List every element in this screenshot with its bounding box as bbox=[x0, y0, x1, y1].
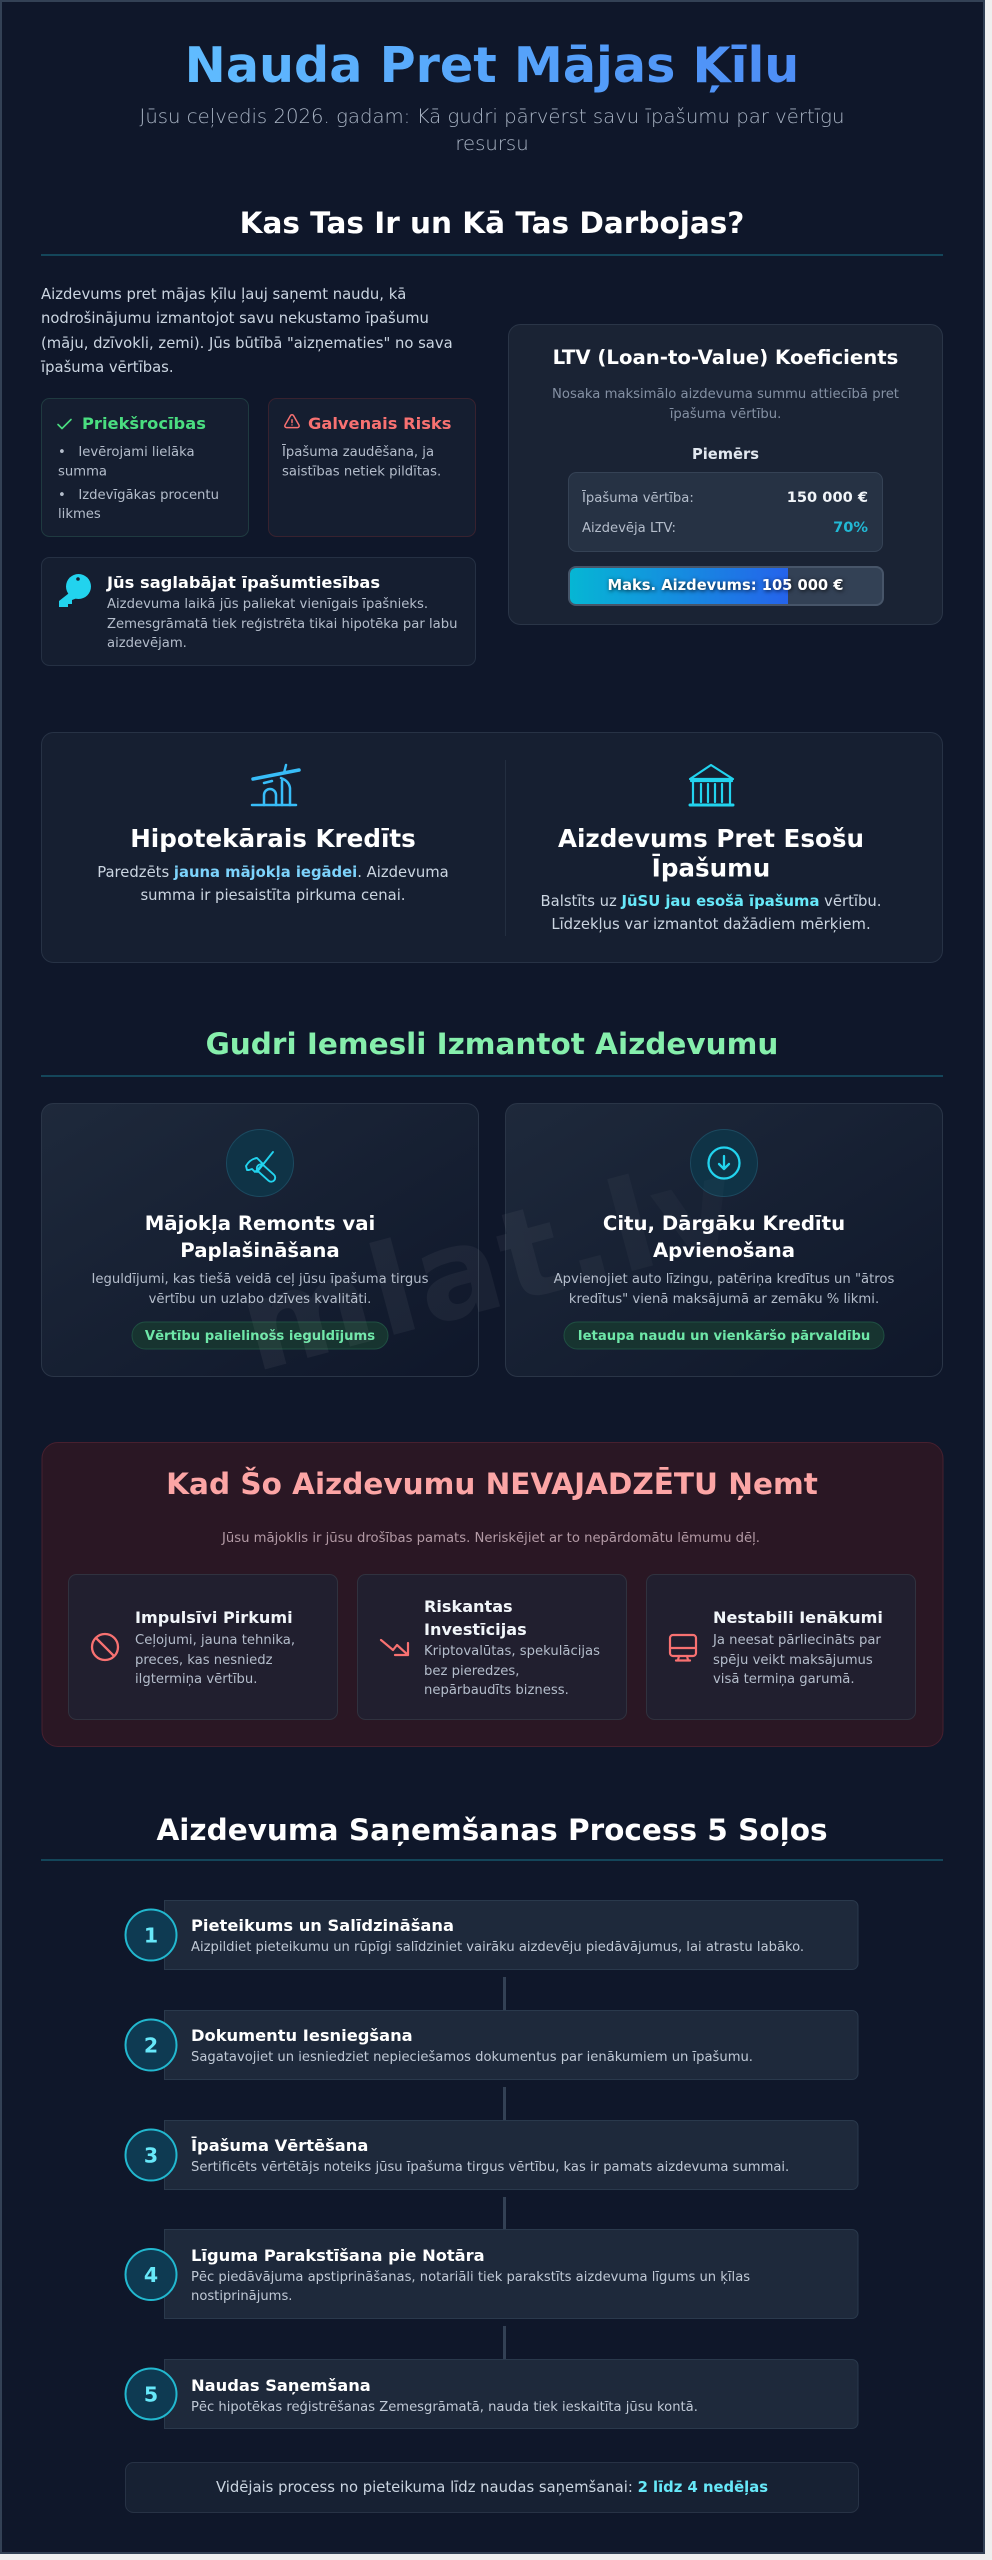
card: unstable income: visā termiņa garumā. bbox=[713, 1672, 855, 1687]
panel: comparison: Paredzēts jauna mājokļa iegādei. Aizdevuma bbox=[97, 864, 449, 881]
icon: check bbox=[58, 420, 71, 428]
panel: ownership bbox=[42, 558, 476, 666]
card: risky investments: Riskantas bbox=[424, 1597, 513, 1616]
panel: renovation: Ieguldījumi, kas tiešā veidā ceļ jūsu īpašuma tirgus bbox=[92, 1271, 429, 1287]
panel: comparison: Hipotekārais Kredīts bbox=[130, 824, 416, 853]
card: risky investments bbox=[358, 1574, 626, 1720]
panel: refinancing: kredītus" vienā maksājumā ar zemāku % likmi. bbox=[569, 1292, 879, 1307]
panel: renovation: vērtību un uzlabo dzīves kvalitāti. bbox=[149, 1292, 371, 1307]
max loan bar bbox=[569, 567, 883, 605]
card: impulse purchases: ilgtermiņa vērtību. bbox=[135, 1672, 257, 1687]
panel: main risk: Galvenais Risks bbox=[308, 414, 451, 433]
step 2: 2 bbox=[144, 2034, 158, 2058]
step 1 bbox=[126, 1900, 858, 1970]
intro paragraph: Aizdevums pret mājas ķīlu ļauj saņemt naudu, kā bbox=[41, 286, 406, 303]
panel: comparison: Aizdevums Pret Esošu bbox=[558, 824, 864, 853]
panel: advantages bbox=[42, 398, 248, 536]
step 5: 5 bbox=[144, 2382, 158, 2406]
step 3: Īpašuma Vērtēšana bbox=[191, 2135, 368, 2155]
intro paragraph: (māju, dzīvokli, zemi). Jūs būtībā "aizņematies" no sava bbox=[41, 335, 453, 352]
panel: LTV: LTV (Loan-to-Value) Koeficients bbox=[553, 346, 898, 369]
example values: 150 000 € bbox=[787, 489, 868, 506]
step 1: 1 bbox=[144, 1924, 158, 1948]
panel: main risk: saistības netiek pildītas. bbox=[282, 464, 441, 480]
heading: what it is: Kas Tas Ir un Kā Tas Darbojas? bbox=[240, 206, 744, 240]
panel: comparison: Balstīts uz JūSU jau esošā īpašuma vērtību. bbox=[540, 893, 882, 910]
card: unstable income: spēju veikt maksājumus bbox=[713, 1653, 873, 1668]
card: risky investments: Investīcijas bbox=[424, 1620, 527, 1639]
panel: refinancing: Apvienojiet auto līzingu, patēriņa kredītus un "ātros bbox=[554, 1272, 894, 1287]
step 1: Aizpildiet pieteikumu un rūpīgi salīdziniet vairāku aizdevēju piedāvājumus, lai atrastu labāko. bbox=[191, 1940, 804, 1955]
panel: when not to take bbox=[42, 1442, 943, 1746]
panel: LTV: īpašuma vērtību. bbox=[669, 406, 781, 422]
panel: advantages: likmes bbox=[58, 507, 101, 522]
title: Nauda Pret Mājas Ķīlu bbox=[185, 36, 799, 94]
panel: when not to take: Jūsu mājoklis ir jūsu drošības pamats. Neriskējiet ar to nepārdomātu lēmumu dēļ. bbox=[221, 1530, 760, 1546]
panel: ownership: aizdevējam. bbox=[107, 636, 187, 651]
card: impulse purchases: Ceļojumi, jauna tehnika, bbox=[135, 1633, 295, 1648]
card: risky investments: nepārbaudīts bizness. bbox=[424, 1683, 569, 1698]
icon: bank bbox=[690, 765, 733, 805]
step 5: Pēc hipotēkas reģistrēšanas Zemesgrāmatā, nauda tiek ieskaitīta jūsu kontā. bbox=[191, 2400, 698, 2415]
panel: comparison: Līdzekļus var izmantot dažādiem mērķiem. bbox=[551, 916, 871, 933]
subtitle bbox=[140, 105, 844, 155]
step 4: nostiprinājums. bbox=[191, 2289, 292, 2304]
panel: ownership: Aizdevuma laikā jūs paliekat vienīgais īpašnieks. bbox=[107, 596, 428, 612]
panel: renovation: Mājokļa Remonts vai bbox=[145, 1212, 375, 1235]
example values bbox=[568, 472, 882, 552]
step 4 bbox=[126, 2230, 858, 2318]
subtitle: resursu bbox=[455, 132, 529, 155]
card: impulse purchases: preces, kas nesniedz bbox=[135, 1653, 273, 1668]
intro paragraph bbox=[40, 286, 453, 376]
card: risky investments: bez pieredzes, bbox=[424, 1664, 519, 1679]
step 3 bbox=[126, 2120, 858, 2190]
panel: advantages: • Ievērojami lielāka bbox=[58, 445, 195, 460]
savings pill bbox=[564, 1322, 884, 1349]
card: risky investments: Kriptovalūtas, spekulācijas bbox=[424, 1644, 600, 1659]
max loan bar: Maks. Aizdevums: 105 000 € bbox=[608, 577, 843, 594]
card: unstable income: Ja neesat pārliecināts par bbox=[712, 1633, 881, 1648]
subtitle: Jūsu ceļvedis 2026. gadam: Kā gudri pārvērst savu īpašumu par vērtīgu bbox=[140, 105, 844, 128]
example values: 70% bbox=[833, 519, 868, 536]
step 3: Sertificēts vērtētājs noteiks jūsu īpašuma tirgus vērtību, kas ir pamats aizdevuma summai. bbox=[191, 2160, 789, 2175]
panel: refinancing bbox=[506, 1104, 942, 1376]
panel: LTV bbox=[508, 324, 942, 624]
panel: advantages: summa bbox=[58, 464, 107, 480]
intro paragraph: nodrošinājumu izmantojot savu nekustamo īpašumu bbox=[41, 310, 429, 327]
panel: main risk bbox=[268, 398, 476, 536]
panel: when not to take: Kad Šo Aizdevumu NEVAJADZĒTU Ņemt bbox=[166, 1465, 818, 1501]
icon: ban bbox=[92, 1634, 118, 1660]
panel: main risk: Īpašuma zaudēšana, ja bbox=[282, 443, 434, 460]
step 5 bbox=[126, 2360, 858, 2428]
heading: process: Aizdevuma Saņemšanas Process 5 Soļos bbox=[156, 1813, 828, 1847]
step 4: Līguma Parakstīšana pie Notāra bbox=[191, 2246, 485, 2265]
panel: renovation bbox=[42, 1104, 478, 1376]
panel: advantages: • Izdevīgākas procentu bbox=[58, 488, 219, 503]
icon: tools bbox=[246, 1152, 277, 1183]
icon: monitor bbox=[670, 1635, 696, 1660]
example values: Aizdevēja LTV: bbox=[582, 521, 676, 536]
savings pill: Ietaupa naudu un vienkāršo pārvaldību bbox=[578, 1328, 870, 1344]
panel: LTV: Piemērs bbox=[692, 446, 759, 463]
panel: refinancing: Apvienošana bbox=[653, 1239, 795, 1262]
icon: warning bbox=[285, 415, 299, 428]
icon: trend down bbox=[381, 1640, 408, 1655]
panel: comparison: summa ir piesaistīta pirkuma cenai. bbox=[140, 887, 406, 904]
value pill: Vērtību palielinošs ieguldījums bbox=[145, 1328, 375, 1344]
card: impulse purchases: Impulsīvi Pirkumi bbox=[135, 1608, 293, 1627]
icon: arrow down circle bbox=[708, 1148, 740, 1178]
step 4: 4 bbox=[144, 2263, 158, 2287]
panel: advantages: Priekšrocības bbox=[82, 414, 206, 433]
step 2: Dokumentu Iesniegšana bbox=[191, 2026, 413, 2045]
step 5: Naudas Saņemšana bbox=[191, 2376, 371, 2395]
panel: refinancing: Citu, Dārgāku Kredītu bbox=[603, 1212, 845, 1235]
example values: Īpašuma vērtība: bbox=[582, 489, 694, 506]
connectors bbox=[503, 1977, 506, 2359]
step 1: Pieteikums un Salīdzināšana bbox=[191, 1916, 454, 1935]
watermark: mlat.lv bbox=[225, 1129, 755, 1401]
panel: comparison bbox=[42, 732, 942, 962]
card: impulse purchases bbox=[68, 1574, 338, 1720]
card: unstable income: Nestabili Ienākumi bbox=[713, 1608, 883, 1627]
step 3: 3 bbox=[144, 2144, 158, 2168]
intro paragraph: īpašuma vērtības. bbox=[40, 359, 174, 376]
step 2: Sagatavojiet un iesniedziet nepieciešamos dokumentus par ienākumiem un īpašumu. bbox=[191, 2050, 753, 2065]
card: unstable income bbox=[646, 1574, 916, 1720]
step 2 bbox=[126, 2010, 858, 2080]
icon: crane bbox=[252, 765, 299, 805]
panel: renovation: Paplašināšana bbox=[180, 1239, 340, 1262]
panel: comparison: Īpašumu bbox=[652, 854, 770, 882]
heading: smart reasons: Gudri Iemesli Izmantot Aizdevumu bbox=[206, 1027, 778, 1061]
panel: ownership: Zemesgrāmatā tiek reģistrēta tikai hipotēka par labu bbox=[107, 617, 457, 632]
duration callout bbox=[126, 2462, 858, 2512]
step 4: Pēc piedāvājuma apstiprināšanas, notariāli tiek parakstīts aizdevuma līgums un ķīlas bbox=[191, 2270, 750, 2285]
duration callout: Vidējais process no pieteikuma līdz naudas saņemšanai: 2 līdz 4 nedēļas bbox=[216, 2479, 768, 2496]
panel: ownership: Jūs saglabājat īpašumtiesības bbox=[106, 573, 380, 592]
icon: key bbox=[59, 574, 91, 607]
panel: LTV: Nosaka maksimālo aizdevuma summu attiecībā pret bbox=[552, 387, 899, 402]
value pill bbox=[132, 1322, 388, 1349]
